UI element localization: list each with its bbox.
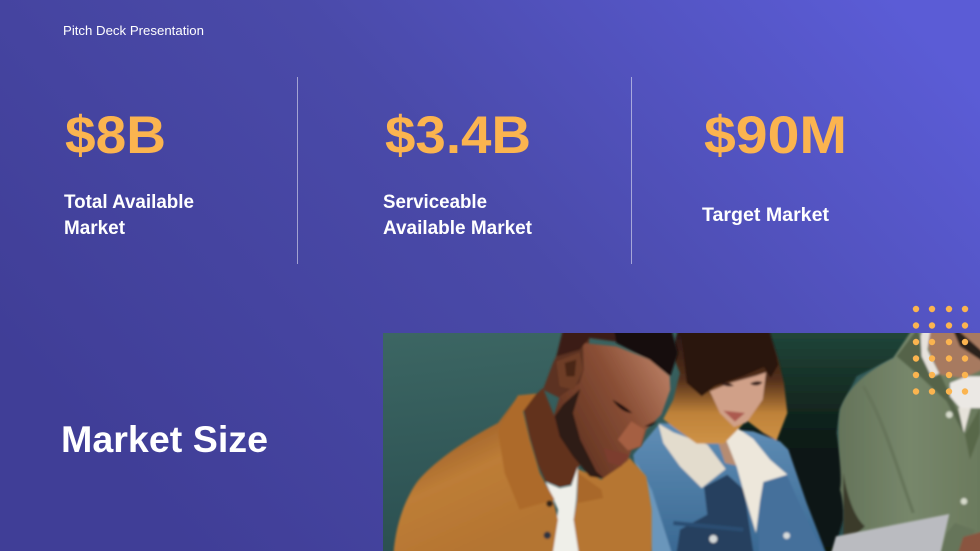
photo: three people with a laptop (383, 333, 980, 551)
divider (296, 77, 298, 264)
dot pattern (913, 306, 968, 395)
header: Pitch Deck Presentation: Pitch Deck Presentation (63, 23, 204, 38)
label: Serviceable Available Market: Serviceable (383, 192, 487, 213)
value: $90M: $90M (704, 106, 847, 165)
neck (523, 388, 580, 487)
buttons (544, 532, 551, 539)
face (554, 343, 670, 478)
ear (556, 352, 583, 390)
value: $3.4B: $3.4B (385, 106, 531, 165)
denim jacket (633, 423, 830, 551)
label: Serviceable Available Market: Available Market (383, 218, 533, 239)
label: Target Market: Target Market (702, 205, 830, 226)
nose (618, 421, 645, 450)
white t-shirt (546, 466, 580, 551)
person: right man in olive shirt (838, 323, 980, 551)
jacket body (393, 394, 558, 551)
dark wall between woman and right man (730, 323, 923, 551)
person: man in orange jacket (393, 323, 678, 551)
value: $8B: $8B (65, 106, 166, 165)
lips (604, 448, 629, 466)
laptop (828, 514, 949, 551)
metric: serviceable available market (383, 106, 533, 239)
eyes (612, 400, 657, 427)
hair (663, 323, 787, 444)
back of head (543, 333, 590, 400)
bangs (680, 323, 778, 396)
neck (715, 430, 740, 466)
fade and hair (556, 323, 626, 356)
jacket collar (498, 394, 555, 510)
metric: target market (702, 106, 847, 226)
label: Total Available Market: Total Available (64, 192, 194, 213)
face (710, 372, 766, 427)
beard (555, 389, 604, 478)
title: Market Size: Market Size (61, 419, 268, 460)
fur collar (658, 424, 726, 488)
divider (630, 77, 632, 264)
label: Total Available Market: Market (64, 218, 126, 239)
person: woman in denim jacket (633, 323, 830, 551)
metric: total available market (64, 106, 194, 239)
